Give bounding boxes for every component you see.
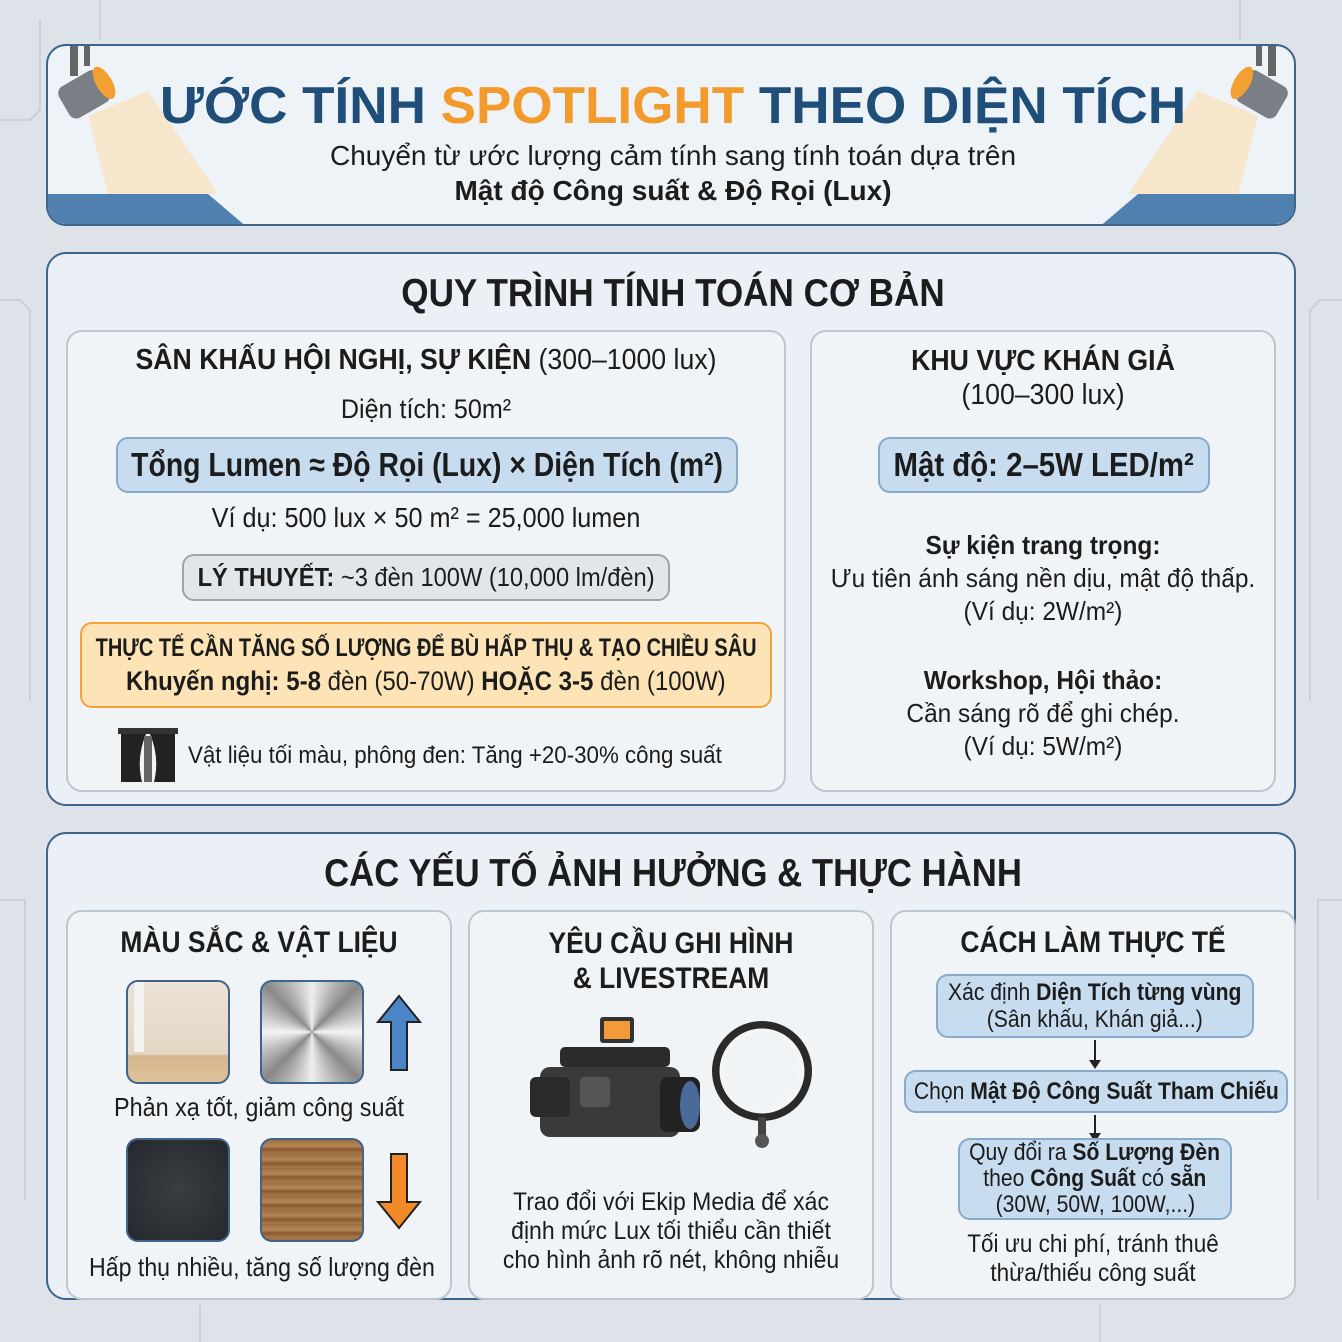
text: cho hình ảnh rõ nét, không nhiễu bbox=[503, 1246, 839, 1274]
density box: Mật độ: 2–5W LED/m² bbox=[894, 446, 1194, 483]
arrow 1 bbox=[1089, 1040, 1101, 1069]
panel: cach lam bbox=[890, 910, 1296, 1300]
title bbox=[549, 926, 793, 995]
text bad: Hấp thụ nhiều, tăng số lượng đèn bbox=[89, 1252, 435, 1282]
text bbox=[503, 1188, 839, 1274]
text: định mức Lux tối thiểu cần thiết bbox=[511, 1217, 831, 1245]
step 2: Chọn Mật Độ Công Suất Tham Chiếu bbox=[914, 1078, 1278, 1104]
icon: up arrow bbox=[376, 994, 422, 1071]
step 3: Quy đổi ra Số Lượng Đèn bbox=[970, 1139, 1220, 1166]
example: Ví dụ: 500 lux × 50 m² = 25,000 lumen bbox=[212, 502, 640, 533]
icon: wood bbox=[260, 1138, 364, 1242]
title: CÁCH LÀM THỰC TẾ bbox=[960, 926, 1226, 959]
title: SÂN KHẤU HỘI NGHỊ, SỰ KIỆN (300–1000 lux) bbox=[135, 344, 717, 376]
workshop: Workshop, Hội thảo: bbox=[924, 665, 1162, 695]
icon: curtain bbox=[118, 728, 178, 782]
result text bbox=[967, 1230, 1219, 1287]
step 3: (30W, 50W, 100W,...) bbox=[995, 1191, 1195, 1218]
subtitle: Mật độ Công suất & Độ Rọi (Lux) bbox=[454, 175, 892, 206]
icon: black fabric bbox=[126, 1138, 230, 1242]
formula box: Tổng Lumen ≈ Độ Rọi (Lux) × Diện Tích (m²) bbox=[131, 446, 723, 483]
heading: CÁC YẾU TỐ ẢNH HƯỞNG & THỰC HÀNH bbox=[324, 852, 1022, 895]
icon: down arrow bbox=[376, 1153, 422, 1230]
arrow 2 bbox=[1089, 1115, 1101, 1138]
practical box: Khuyến nghị: 5-8 đèn (50-70W) HOẶC 3-5 đèn (100W) bbox=[126, 666, 726, 696]
title: MÀU SẮC & VẬT LIỆU bbox=[120, 926, 398, 959]
theory box bbox=[182, 554, 670, 601]
step 1: Xác định Diện Tích từng vùng bbox=[948, 979, 1242, 1006]
icon: metal bbox=[260, 980, 364, 1084]
panel: ghi hinh bbox=[468, 910, 874, 1300]
panel: khan gia bbox=[810, 330, 1276, 792]
step 3 bbox=[958, 1138, 1232, 1220]
subtitle: Chuyển từ ước lượng cảm tính sang tính toán dựa trên bbox=[330, 140, 1016, 171]
floor band bbox=[48, 91, 1294, 224]
title: KHU VỰC KHÁN GIẢ bbox=[911, 345, 1175, 377]
subtitle bbox=[330, 140, 1016, 206]
area: Diện tích: 50m² bbox=[341, 394, 511, 424]
heading: QUY TRÌNH TÍNH TOÁN CƠ BẢN bbox=[401, 272, 945, 315]
step 1: (Sân khấu, Khán giả...) bbox=[987, 1006, 1203, 1033]
panel: quy trinh bbox=[46, 252, 1296, 806]
step 3: theo Công Suất có sẵn bbox=[983, 1165, 1207, 1192]
icon: bright room bbox=[126, 980, 230, 1084]
result text: Tối ưu chi phí, tránh thuê bbox=[967, 1230, 1219, 1258]
workshop: Cần sáng rõ để ghi chép. bbox=[906, 698, 1180, 728]
theory box: LÝ THUYẾT: ~3 đèn 100W (10,000 lm/đèn) bbox=[198, 562, 654, 592]
workshop bbox=[906, 665, 1180, 761]
icon: spotlight left bbox=[58, 46, 116, 118]
density box bbox=[878, 437, 1210, 493]
text good: Phản xạ tốt, giảm công suất bbox=[114, 1092, 404, 1122]
title: (100–300 lux) bbox=[961, 379, 1125, 411]
title: & LIVESTREAM bbox=[573, 962, 769, 995]
step 1 bbox=[936, 974, 1254, 1038]
title: YÊU CẦU GHI HÌNH bbox=[549, 927, 793, 960]
note: Vật liệu tối màu, phông đen: Tăng +20-30% công suất bbox=[188, 742, 722, 769]
icon: spotlight right bbox=[1230, 46, 1288, 118]
formal events: Ưu tiên ánh sáng nền dịu, mật độ thấp. bbox=[831, 563, 1255, 593]
practical box bbox=[80, 622, 772, 708]
result text: thừa/thiếu công suất bbox=[990, 1259, 1196, 1287]
formal events bbox=[831, 530, 1255, 626]
formula box bbox=[116, 437, 738, 493]
panel: yeu to bbox=[46, 832, 1296, 1300]
icon: ring light bbox=[712, 1021, 812, 1148]
title: ƯỚC TÍNH SPOTLIGHT THEO DIỆN TÍCH bbox=[160, 77, 1186, 135]
title bbox=[911, 344, 1175, 411]
icon: camera bbox=[530, 1017, 700, 1137]
text: Trao đổi với Ekip Media để xác bbox=[513, 1188, 829, 1216]
panel: san khau bbox=[66, 330, 786, 792]
header panel bbox=[46, 44, 1296, 226]
workshop: (Ví dụ: 5W/m²) bbox=[964, 731, 1122, 761]
step 2 bbox=[904, 1070, 1288, 1113]
panel: mau sac bbox=[66, 910, 452, 1300]
formal events: Sự kiện trang trọng: bbox=[926, 530, 1160, 560]
practical box: THỰC TẾ CẦN TĂNG SỐ LƯỢNG ĐỂ BÙ HẤP THỤ & TẠO CHIỀU SÂU bbox=[96, 634, 756, 662]
formal events: (Ví dụ: 2W/m²) bbox=[964, 596, 1122, 626]
